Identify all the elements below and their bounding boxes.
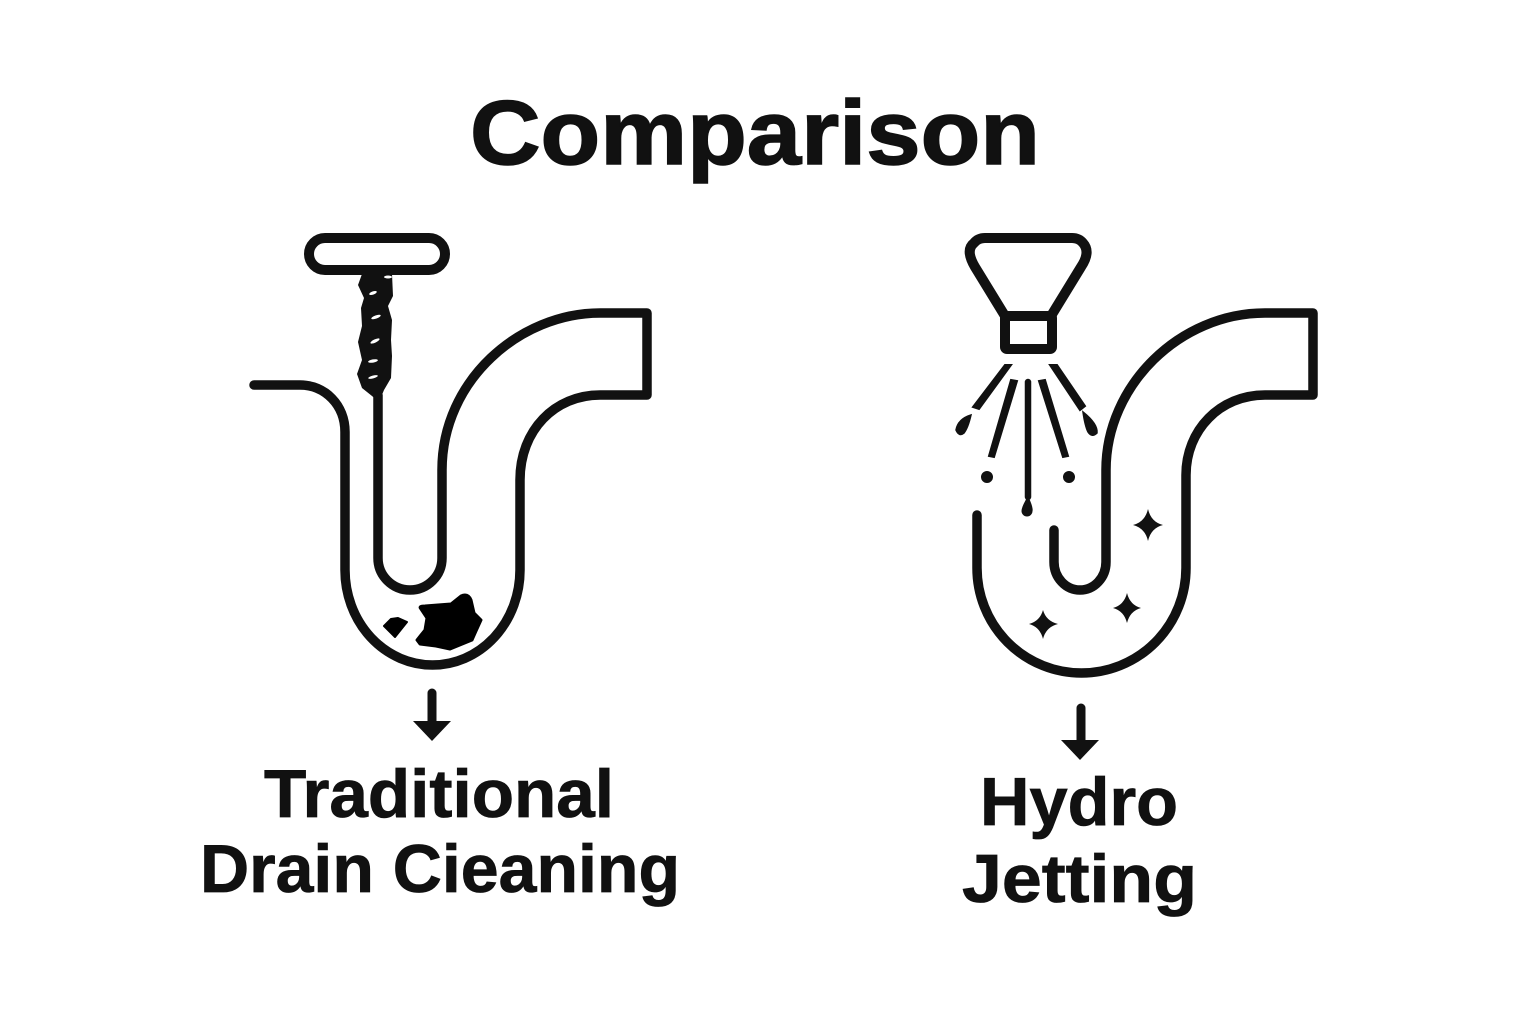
- icon: clean drain pipe: [977, 313, 1313, 673]
- heading: hydro jetting: [962, 764, 1197, 917]
- icon: water spray: [956, 365, 1097, 516]
- icon: auger coil: [357, 274, 393, 402]
- icon: jet nozzle: [970, 238, 1087, 349]
- arrow: down to hydro label: [1061, 708, 1099, 760]
- icon: sparkle left: [1029, 610, 1058, 639]
- panel: traditional drain cleaning: [200, 238, 680, 907]
- icon: auger handle: [309, 238, 445, 270]
- icon: small clog: [384, 618, 407, 637]
- icon: sparkle upper: [1133, 509, 1163, 541]
- heading: traditional drain cleaning: [200, 756, 680, 907]
- heading: traditional drain cleaning: Drain Cieaning: [200, 831, 680, 907]
- arrow: down to traditional label: [413, 693, 451, 741]
- panel: hydro jetting: [956, 238, 1313, 917]
- icon: large clog: [417, 595, 481, 649]
- heading: hydro jetting: Hydro: [980, 764, 1178, 840]
- heading: traditional drain cleaning: Traditional: [264, 756, 614, 832]
- icon: sparkle right: [1113, 593, 1141, 623]
- heading: hydro jetting: Jetting: [962, 841, 1197, 917]
- icon: drain pipe with auger cable: [254, 313, 647, 665]
- title: Comparison: [470, 83, 1040, 184]
